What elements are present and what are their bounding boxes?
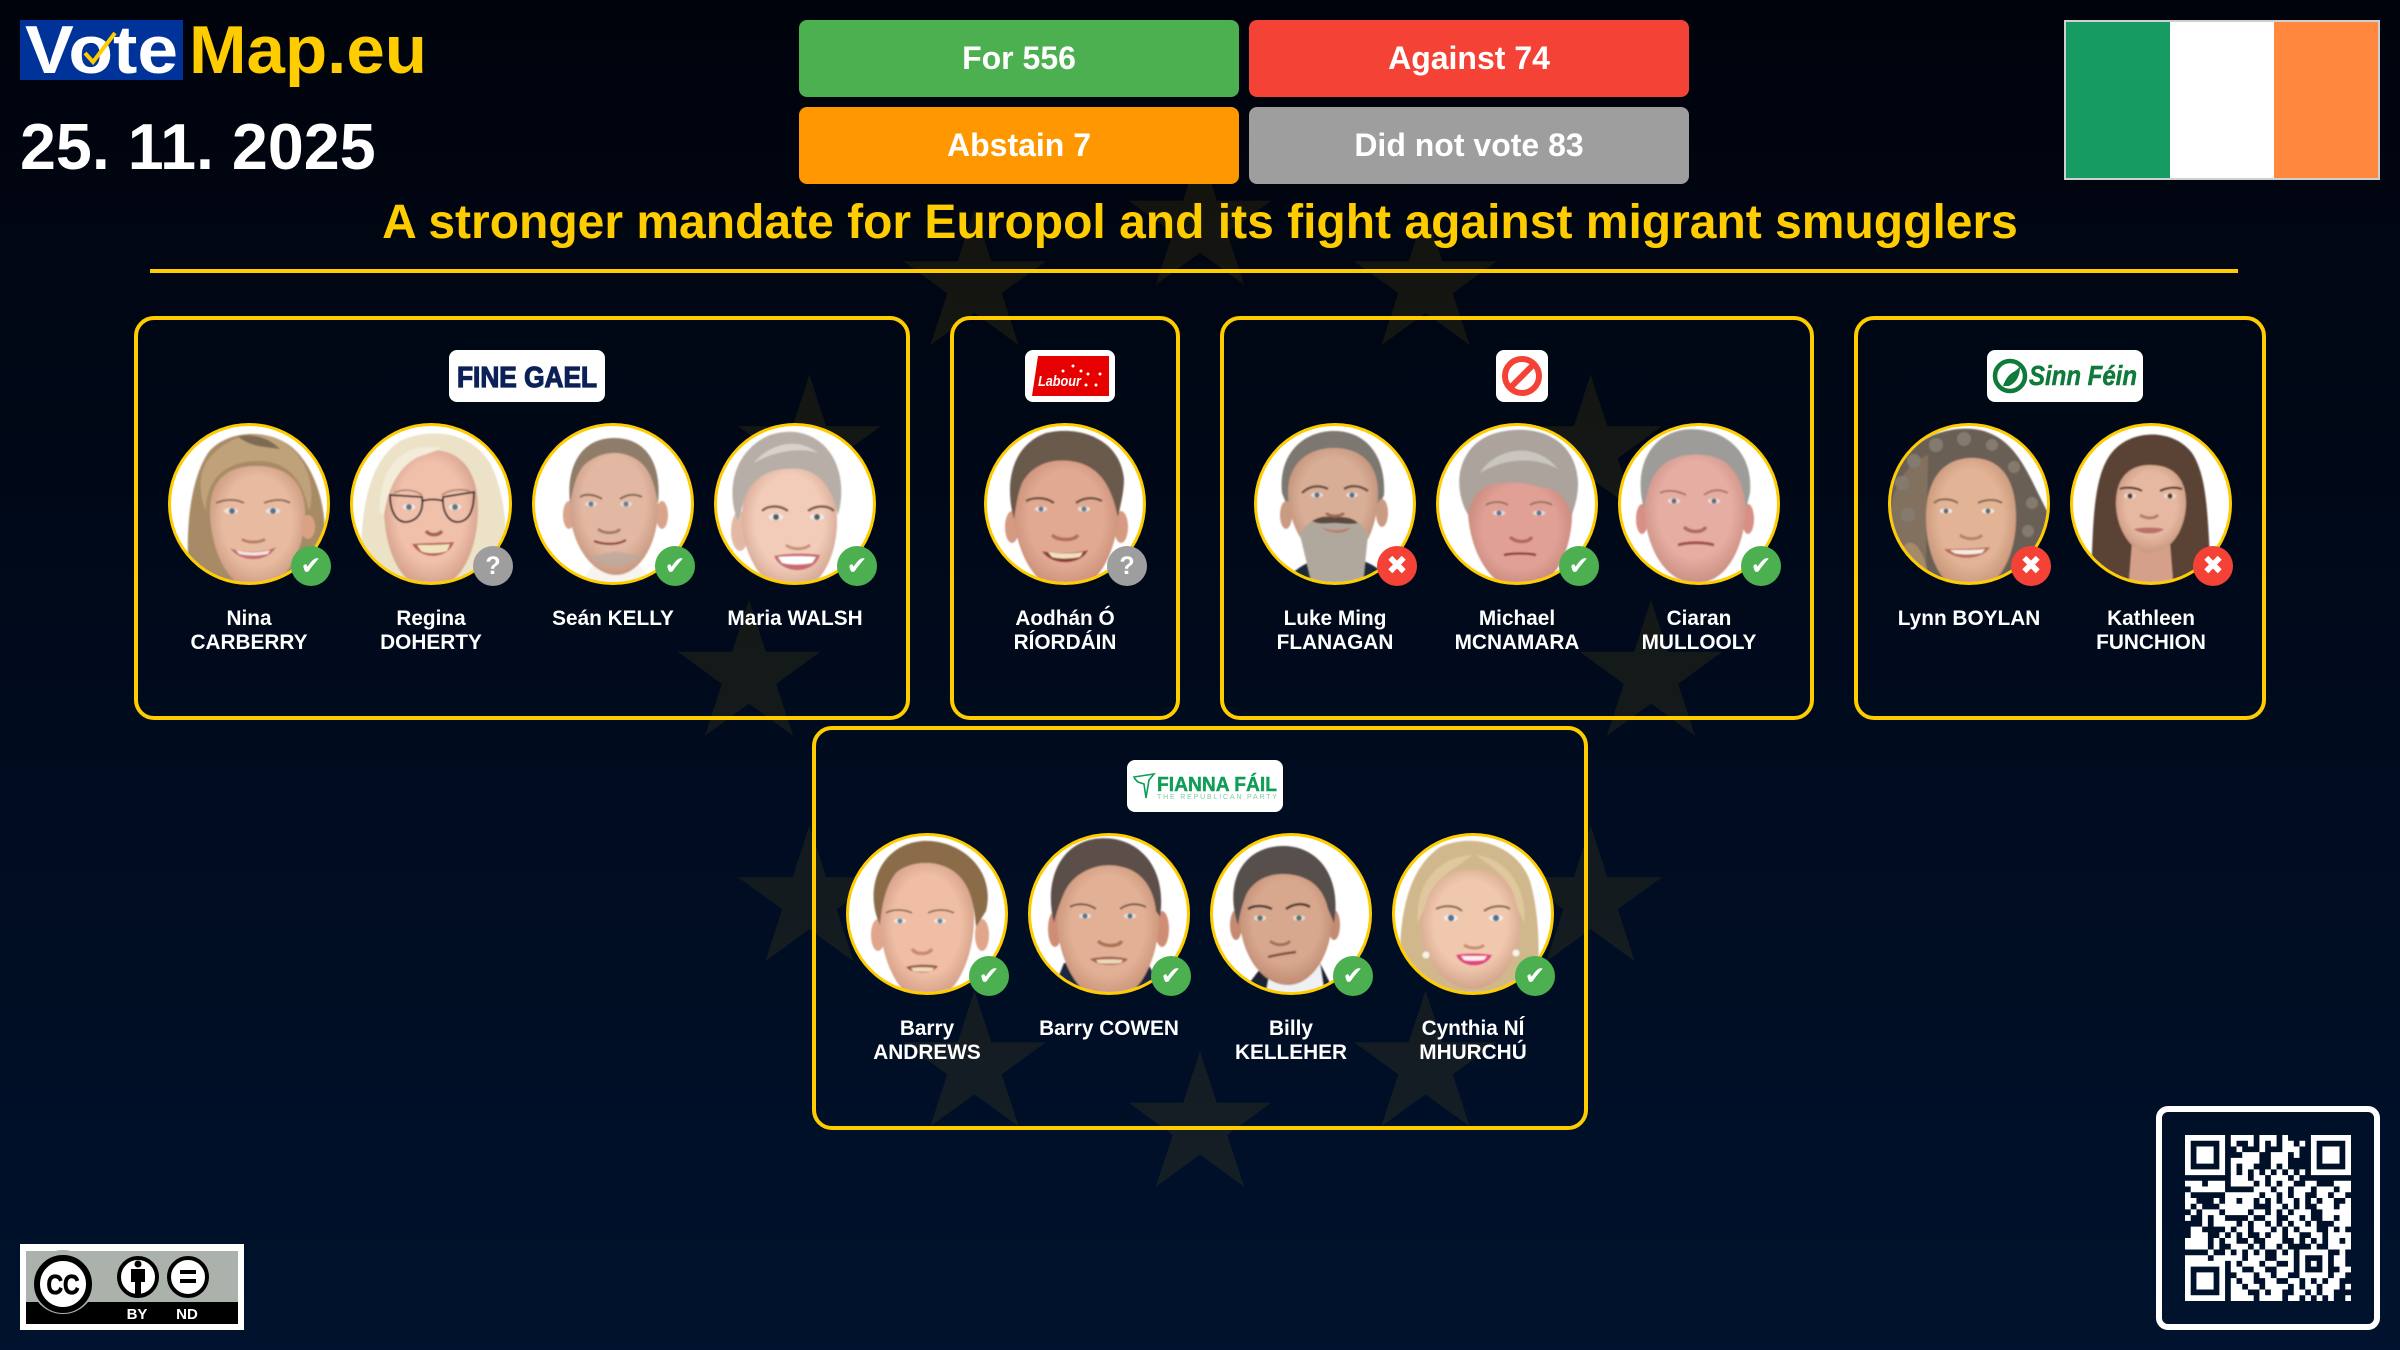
title rule xyxy=(150,269,2238,273)
vote badge: for xyxy=(1741,546,1781,586)
party logo: non-attached xyxy=(1496,350,1548,402)
vote badge: against: ✖ xyxy=(2020,551,2042,581)
name: FUNCHION xyxy=(2096,630,2206,654)
name: Billy xyxy=(1269,1016,1313,1040)
logo: VoteMap.eu xyxy=(20,20,427,88)
vote badge: for: ✔ xyxy=(665,551,685,580)
vote badge: for: ✔ xyxy=(1751,551,1771,580)
name: Seán KELLY xyxy=(552,606,674,630)
QR code xyxy=(2156,1106,2380,1330)
vote badge: did not vote xyxy=(473,546,513,586)
member: Seán Kelly xyxy=(532,423,695,630)
name: Ciaran xyxy=(1667,606,1731,630)
name xyxy=(1642,606,1756,654)
name: Nina xyxy=(226,606,272,630)
party logo: Fianna Fáil: THE REPUBLICAN PARTY xyxy=(1157,794,1277,801)
date: 25. 11. 2025 xyxy=(20,111,376,183)
vote count: did not vote: Did not vote 83 xyxy=(1354,127,1584,163)
vote badge: for: ✔ xyxy=(1525,961,1545,990)
vote count: did not vote xyxy=(1249,107,1689,184)
member: Aodhán Ó Ríordáin xyxy=(984,423,1147,654)
vote count: for: For 556 xyxy=(962,40,1076,76)
panel: Fianna Fáil xyxy=(812,726,1588,1130)
license: CC BY-ND: CC xyxy=(46,1269,80,1300)
vote badge: for xyxy=(969,956,1009,996)
name: RÍORDÁIN xyxy=(1014,630,1116,654)
flag: Ireland xyxy=(2064,20,2380,180)
vote badge: against xyxy=(2011,546,2051,586)
name: Luke Ming xyxy=(1284,606,1386,630)
name: MHURCHÚ xyxy=(1419,1040,1527,1064)
vote count: against xyxy=(1249,20,1689,97)
name: FLANAGAN xyxy=(1277,630,1393,654)
vote badge: for: ✔ xyxy=(1569,551,1589,580)
vote badge: for xyxy=(1333,956,1373,996)
name xyxy=(2096,606,2206,654)
vote badge: against xyxy=(1377,546,1417,586)
vote badge: against: ✖ xyxy=(2202,551,2224,581)
party logo: Fianna Fáil: FIANNA FÁIL xyxy=(1157,773,1277,796)
party logo: Sinn Féin xyxy=(1987,350,2143,402)
vote badge: for: ✔ xyxy=(1161,961,1181,990)
party logo: Fianna Fáil xyxy=(1127,760,1283,812)
name xyxy=(380,606,482,654)
vote badge: for xyxy=(1151,956,1191,996)
name: Kathleen xyxy=(2107,606,2195,630)
name xyxy=(1277,606,1393,654)
member: Maria Walsh xyxy=(714,423,877,630)
name xyxy=(1455,606,1579,654)
party logo: Labour: Labour xyxy=(1038,373,1082,390)
panel: Independent xyxy=(1220,316,1814,720)
member: Michael McNamara xyxy=(1436,423,1599,654)
vote badge: for: ✔ xyxy=(1343,961,1363,990)
name: Michael xyxy=(1479,606,1555,630)
name: Maria WALSH xyxy=(727,606,863,630)
party logo: Labour xyxy=(1025,350,1115,402)
name xyxy=(1235,1016,1347,1064)
name: CARBERRY xyxy=(190,630,308,654)
vote badge: for xyxy=(1515,956,1555,996)
vote badge: did not vote: ? xyxy=(1119,552,1135,580)
vote count: abstain: Abstain 7 xyxy=(947,127,1091,163)
vote count: for xyxy=(799,20,1239,97)
panel: Labour xyxy=(950,316,1180,720)
member: Barry Andrews xyxy=(846,833,1009,1064)
name xyxy=(1014,606,1116,654)
name: Barry xyxy=(900,1016,954,1040)
name xyxy=(1419,1016,1527,1064)
vote count: abstain xyxy=(799,107,1239,184)
member: Barry Cowen xyxy=(1028,833,1191,1040)
name xyxy=(190,606,308,654)
license: CC BY-ND: BY xyxy=(127,1306,147,1323)
name: Cynthia NÍ xyxy=(1422,1016,1524,1040)
vote badge: against xyxy=(2193,546,2233,586)
panel: Sinn Féin xyxy=(1854,316,2266,720)
name: Lynn BOYLAN xyxy=(1898,606,2040,630)
member: Billy Kelleher xyxy=(1210,833,1373,1064)
member: Regina Doherty xyxy=(350,423,513,654)
vote badge: did not vote xyxy=(1107,546,1147,586)
name: ANDREWS xyxy=(873,1040,981,1064)
name xyxy=(873,1016,981,1064)
vote badge: for xyxy=(837,546,877,586)
vote badge: for: ✔ xyxy=(979,961,999,990)
party logo: Fine Gael xyxy=(449,350,605,402)
name: Aodhán Ó xyxy=(1015,606,1115,630)
vote badge: for xyxy=(1559,546,1599,586)
vote badge: against: ✖ xyxy=(1386,551,1408,581)
vote badge: for: ✔ xyxy=(301,551,321,580)
member: Nina Carberry xyxy=(168,423,331,654)
member: Ciaran Mullooly xyxy=(1618,423,1781,654)
vote count: against: Against 74 xyxy=(1388,40,1550,76)
member: Kathleen Funchion xyxy=(2070,423,2233,654)
name: Regina xyxy=(396,606,466,630)
name: DOHERTY xyxy=(380,630,482,654)
name: MCNAMARA xyxy=(1455,630,1579,654)
name: MULLOOLY xyxy=(1642,630,1756,654)
member: Lynn Boylan xyxy=(1888,423,2051,630)
name: Barry COWEN xyxy=(1039,1016,1179,1040)
vote badge: for: ✔ xyxy=(847,551,867,580)
license: CC BY-ND: ND xyxy=(176,1306,198,1323)
member: Cynthia Ní Mhurchú xyxy=(1392,833,1555,1064)
name: KELLEHER xyxy=(1235,1040,1347,1064)
member: Luke Ming Flanagan xyxy=(1254,423,1417,654)
license: CC BY-ND xyxy=(20,1244,244,1330)
vote badge: for xyxy=(655,546,695,586)
panel: Fine Gael xyxy=(134,316,910,720)
title: A stronger mandate for Europol and its fight against migrant smugglers xyxy=(382,196,2018,249)
vote badge: did not vote: ? xyxy=(485,552,501,580)
vote badge: for xyxy=(291,546,331,586)
